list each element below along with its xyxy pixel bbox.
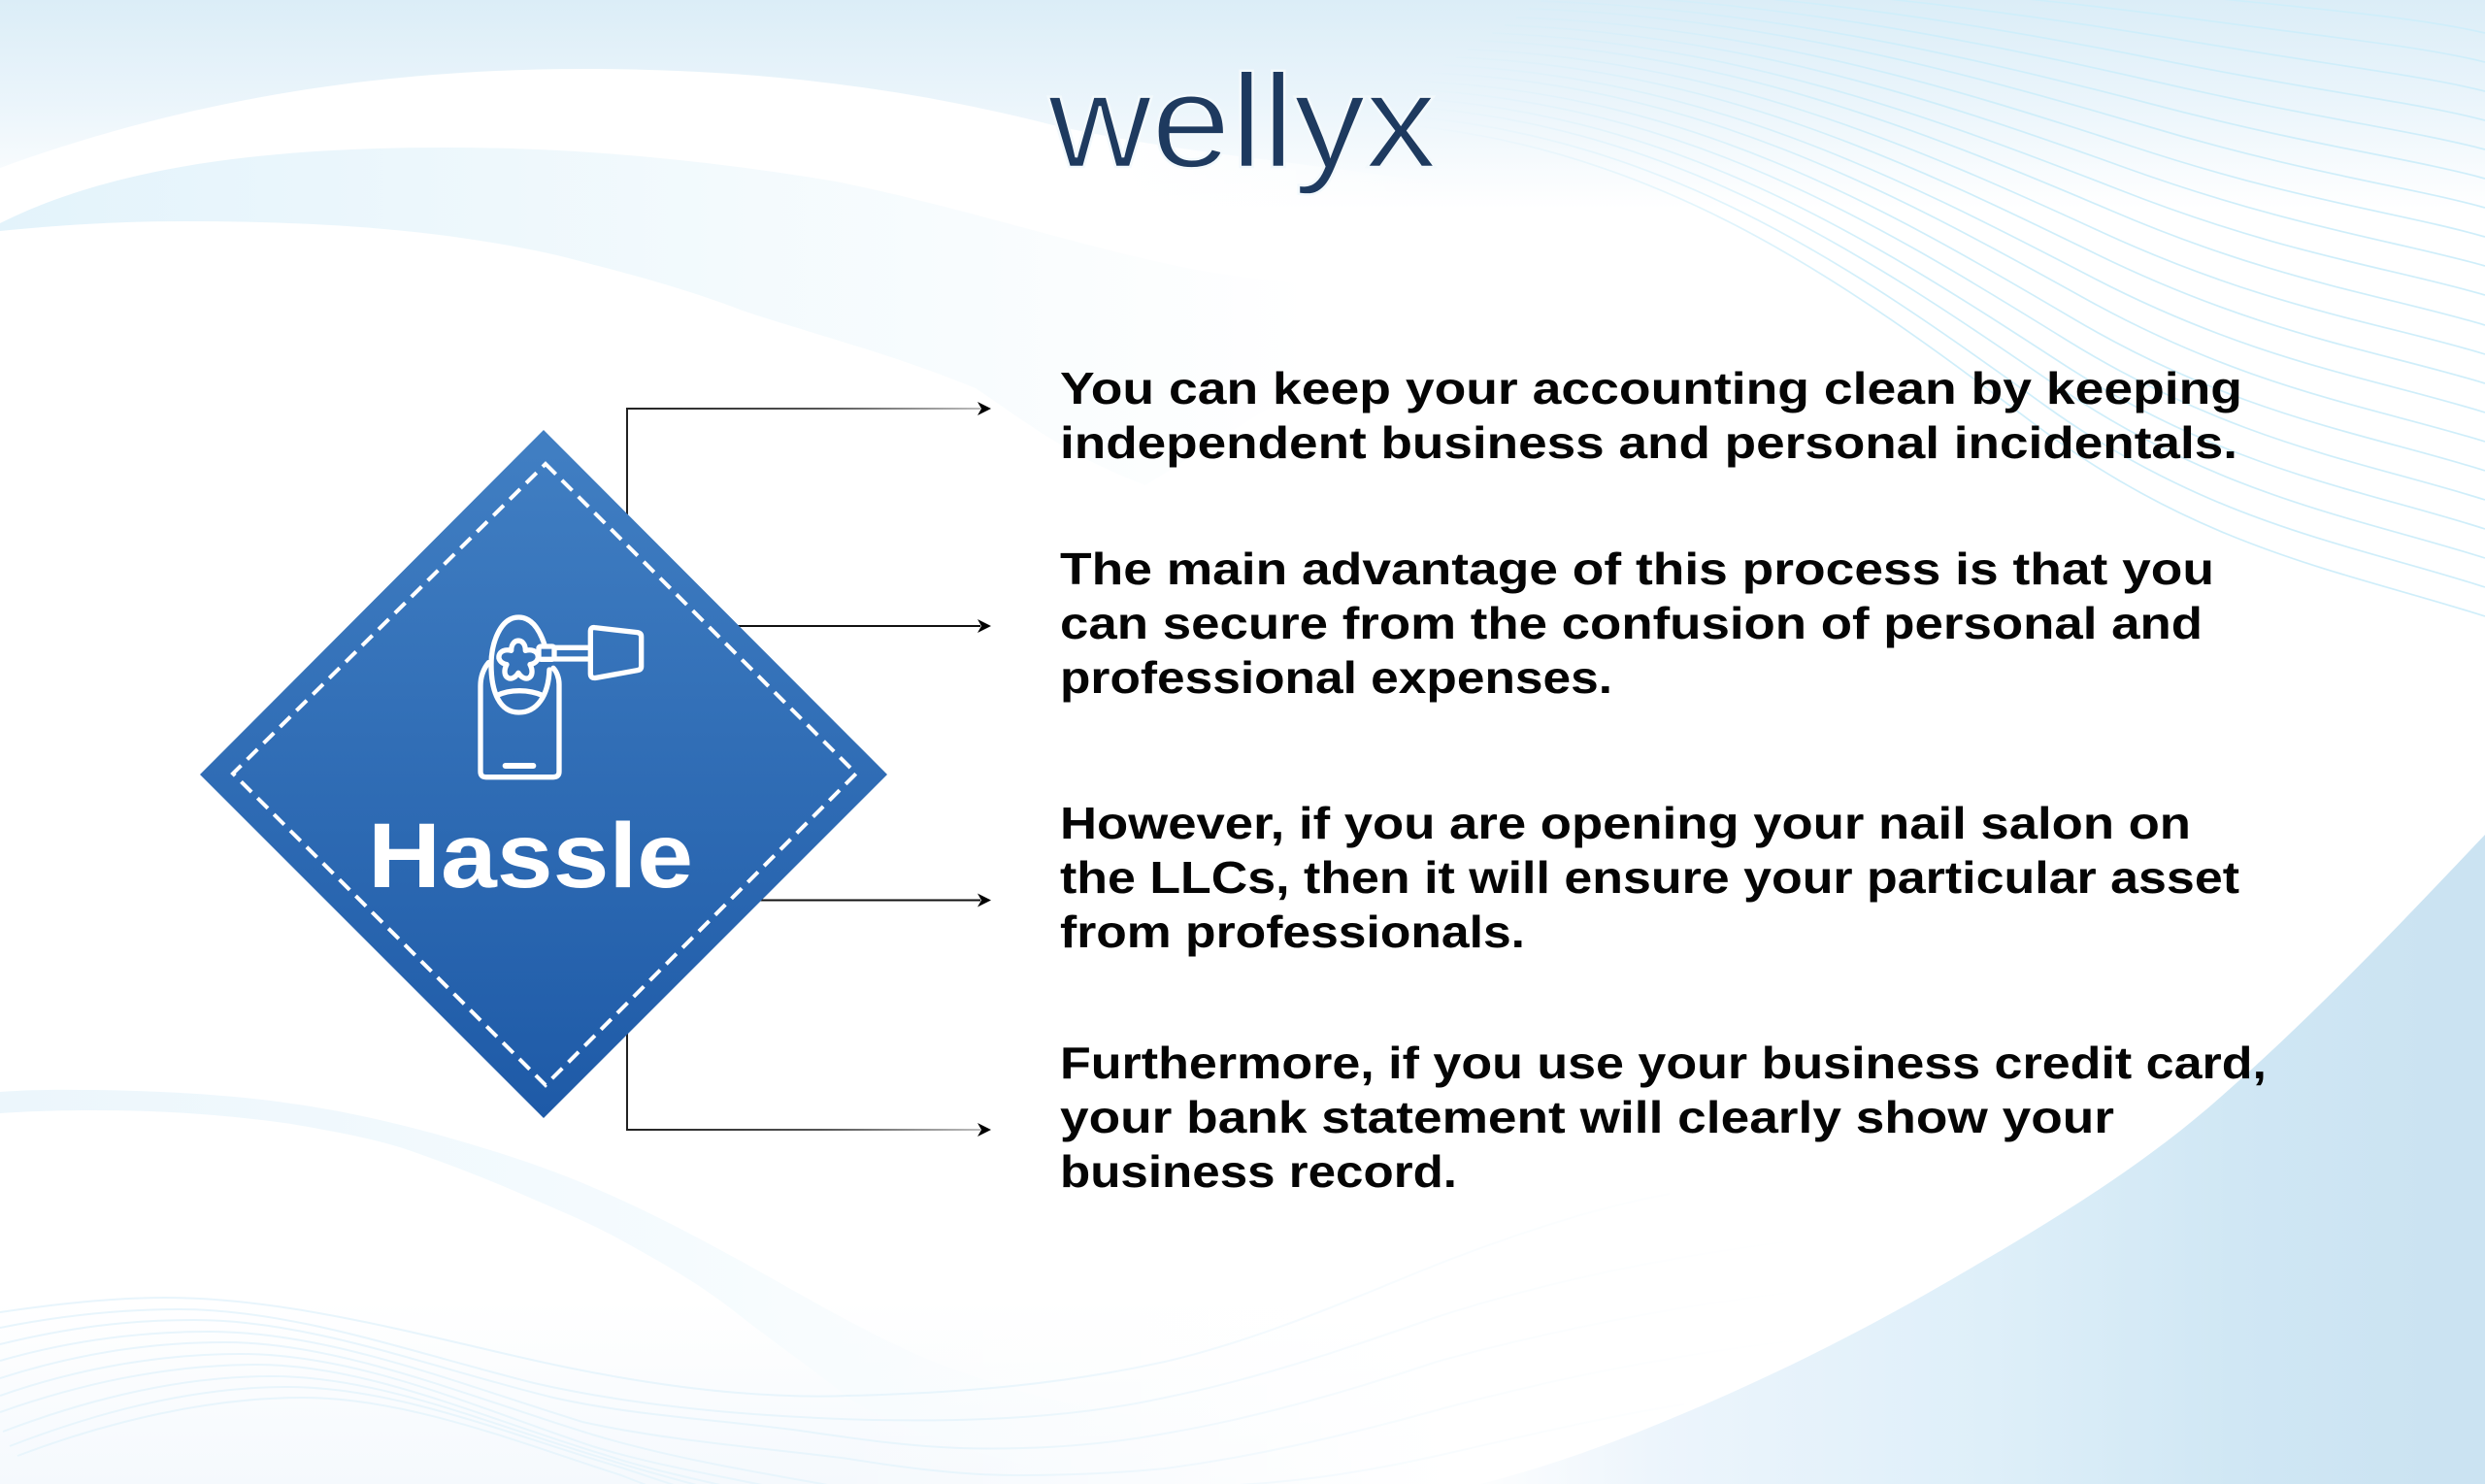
text block: third point: [1060, 798, 2239, 957]
arrow: connector to second point: [736, 619, 991, 633]
text block: first point: [1060, 363, 2242, 468]
text block: third point: the LLCs, then it will ensure your particular asset: [1060, 852, 2239, 903]
logo: wellyx: wellyx: [1047, 48, 1437, 196]
arrow: connector to third point: [755, 893, 991, 907]
text block: first point: You can keep your accounting clean by keeping: [1060, 363, 2242, 413]
text block: second point: [1060, 544, 2214, 703]
panel: blue Hassle diamond: [200, 430, 887, 1118]
text block: fourth point: [1060, 1038, 2267, 1197]
text block: second point: The main advantage of this process is that you: [1060, 544, 2214, 594]
heading: Hassle: Hassle: [368, 805, 693, 907]
text block: first point: independent business and personal incidentals.: [1060, 417, 2237, 468]
arrow: connector to fourth point: [627, 1029, 991, 1137]
text block: fourth point: business record.: [1060, 1146, 1457, 1197]
text block: second point: professional expenses.: [1060, 652, 1612, 703]
diamond shape: [200, 430, 887, 1118]
dashed inner border: [233, 464, 856, 1085]
text block: second point: can secure from the confusion of personal and: [1060, 598, 2203, 648]
arrow: connector to first point: [627, 402, 991, 514]
text block: fourth point: your bank statement will clearly show your: [1060, 1092, 2114, 1142]
icon: nail with polish brush: [480, 617, 642, 777]
text block: fourth point: Furthermore, if you use your business credit card,: [1060, 1038, 2267, 1088]
text block: third point: However, if you are opening your nail salon on: [1060, 798, 2191, 848]
text block: third point: from professionals.: [1060, 907, 1525, 957]
